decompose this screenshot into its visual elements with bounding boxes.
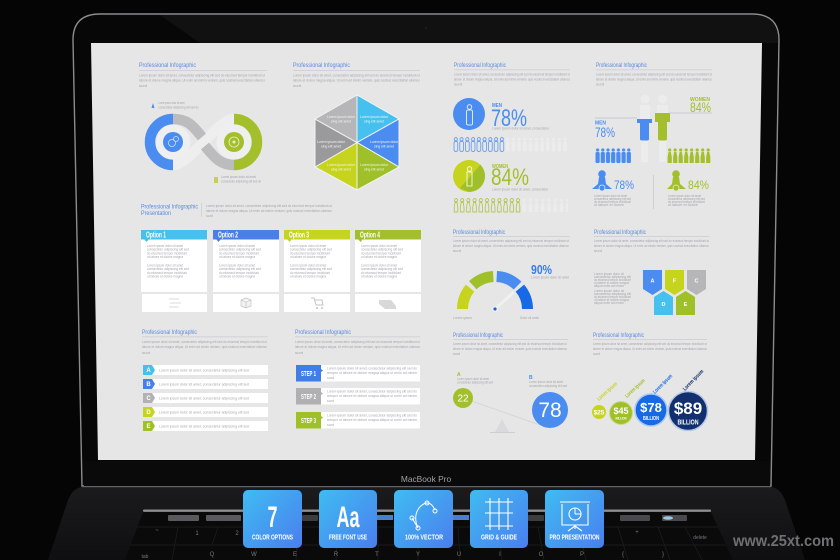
text: columns: Lorem ipsum dolor sit amet [594,194,627,198]
bubble: $78: BILLION [643,416,659,422]
panel: hexagon [293,62,420,190]
chart: hexagon: sing elit amet [331,168,351,172]
callout: B: consectetur adipiscing elit sed [529,384,567,388]
chart: hexagon: sing elit amet [364,120,384,124]
tile: grid and guide: GRID & GUIDE [481,532,517,542]
step 1 [296,365,420,382]
card: option 2: ut labore et dolore magna [219,255,255,259]
card: option 2: ut labore et dolore magna [219,274,255,278]
bubble: $89: $89 [674,399,702,418]
card: option 2: consectetur adipiscing elit sed [219,267,261,271]
tile: free font use [319,490,377,548]
text block: sunt [593,352,600,356]
list rows: Lorem ipsum dolor sit amet, consectetur adipiscing elit sed [159,396,249,400]
pictogram row: men [453,137,568,152]
card: option 3: do eiusmod tempor incididunt [290,252,330,256]
panel: gauge [453,229,570,320]
list rows: D [146,410,151,416]
callout: top: consectetur adipiscing elit sed do [158,106,199,110]
text block [596,72,712,86]
heading: Professional Infographic [596,62,648,69]
list rows: Lorem ipsum dolor sit amet, consectetur adipiscing elit sed [159,410,249,414]
list rows: Lorem ipsum dolor sit amet, consectetur adipiscing elit sed [159,382,249,386]
keyboard labels: 2 [235,531,239,537]
text: columns: Lorem ipsum dolor sit amet [668,194,701,198]
tile: free font use: FREE FONT USE [329,532,367,542]
stat: 90%: 90% [531,262,552,277]
heading [454,62,570,70]
rotated labels: Lorem Ipsum [682,369,705,392]
text block: Lorem ipsum dolor sit amet, consectetur adipiscing elit sed do eiusmod tempor incididunt ut [596,72,712,76]
card: option 3: ut labore et dolore magna [290,274,326,278]
tile: vector [394,490,453,548]
chart: hexagon [315,95,399,190]
chart: shields [643,270,706,315]
card: option 4: ut labore et dolore magna [361,255,397,259]
card: option 1: Lorem ipsum dolor sit amet [147,244,183,248]
text block: Lorem ipsum dolor sit amet, consectetur adipiscing elit sed do eiusmod tempor incididunt ut [293,74,420,78]
text: side notes: ut labore et dolore magna [594,298,629,302]
text: side notes: aliqua enim ad minim [594,284,624,288]
step 1: STEP 1 [301,371,316,378]
women stat: WOMEN [492,164,508,170]
screen [91,43,762,460]
text block [293,74,420,88]
chart: hexagon: sing elit amet [374,144,394,148]
text: columns: consectetur adipiscing elit sed [668,197,705,201]
stat: men: 78% [614,178,634,192]
callout: B [529,375,567,388]
keyboard labels: { [622,552,624,558]
step 3: STEP 3 [301,418,316,425]
panel: letter list [142,329,268,431]
heading: Professional Infographic [454,62,507,69]
panel: options [141,203,421,312]
chart: hexagon: Lorem ipsum dolor [360,163,389,167]
chart: gauge [462,276,528,312]
heading: Professional Infographic [295,329,352,336]
card: option 1: do eiusmod tempor incididunt [147,271,187,275]
text block: Lorem ipsum dolor sit amet, consectetur adipiscing elit sed do eiusmod tempor incididunt ut [454,72,570,76]
text: side notes: do eiusmod tempor incididunt [594,295,631,299]
step 2 [296,388,420,404]
text block: labore et dolore magna aliqua. Ut enim ad minim veniam, quis nostrud exercitation ullamco [593,347,707,351]
text block: labore et dolore magna aliqua. Ut enim ad minim veniam, quis nostrud exercitation ullamco [142,345,267,349]
stat: men [592,170,634,192]
women label [690,97,711,115]
text block: labore et dolore magna aliqua. Ut enim ad minim veniam, quis nostrud exercitation ullamco [596,78,712,82]
card: option 3: Lorem ipsum dolor sit amet [290,264,326,268]
callout: A: consectetur adipiscing elit sed [457,380,493,384]
card: option 3: Lorem ipsum dolor sit amet [290,244,326,248]
pictogram rows [595,148,711,163]
chart: hexagon: Lorem ipsum dolor [327,163,356,167]
keyboard labels: 1 [195,531,199,537]
card: option 4: consectetur adipiscing elit sed [361,248,403,252]
chart: hexagon: Lorem ipsum dolor [370,140,399,144]
bubble: $78: $78 [640,400,662,415]
card: option 4: Lorem ipsum dolor sit amet [361,264,397,268]
list rows: Lorem ipsum dolor sit amet, consectetur adipiscing elit sed [159,368,249,372]
men label: MEN [595,120,606,126]
keyboard labels: Y [416,552,420,558]
text: columns: do eiusmod tempor incididunt [594,200,631,204]
card: option 1 [141,230,207,312]
step 1: Lorem ipsum dolor sit amet, consectetur adipiscing elit sed do [327,366,417,370]
bubble: $45 [610,402,632,424]
keyboard labels: I [499,552,501,558]
icon: women circle [453,160,485,192]
card: option 2: do eiusmod tempor incididunt [219,271,259,275]
card: option 2: Option 2 [218,230,238,240]
text block: labore et dolore magna aliqua. Ut enim ad minim veniam, quis nostrud exercitation ullamco [295,345,420,349]
text block [206,204,332,218]
card: option 1: consectetur adipiscing elit sed [147,267,189,271]
pictogram row: women [453,198,568,213]
card: option 4: do eiusmod tempor incididunt [361,271,401,275]
tile: color options: COLOR OPTIONS [252,532,293,542]
MacBook Pro label: MacBook Pro [401,474,451,484]
text block: sunt [453,249,461,253]
callout: B: B [529,375,533,381]
card: option 3: consectetur adipiscing elit sed [290,267,332,271]
callout: bottom: consectetur adipiscing elit sed do [221,180,261,184]
panel: gender comparison [592,62,712,209]
callout: A [457,372,493,384]
card: option 4: consectetur adipiscing elit sed [361,267,403,271]
step 3: Lorem ipsum dolor sit amet, consectetur adipiscing elit sed do [327,414,417,418]
bubble: $25: $25 [594,410,605,416]
chart: shields: A [651,278,655,284]
heading: Professional Infographic [139,62,197,69]
list rows: A [146,368,151,374]
tile: grid and guide [470,490,528,548]
panel: balance scale [453,332,568,433]
chart: shields: F [673,278,677,284]
text block: sunt [142,351,150,355]
step 2: STEP 2 [301,394,316,401]
keyboard labels: U [457,552,461,558]
heading: Professional Infographic [453,229,506,236]
text block: Lorem ipsum dolor sit amet, consectetur adipiscing elit sed do eiusmod tempor incididunt ut [594,239,709,243]
text: columns [594,175,705,209]
text block [453,239,569,253]
text block [594,239,709,253]
chart: hexagon: Lorem ipsum dolor [317,140,346,144]
text block: sunt [454,82,462,86]
panel: steps [295,329,420,428]
men stat: MEN [492,103,502,109]
step 2: tempor ut labore et dolore magna aliqua ut enim ad minim [327,394,417,398]
text block: sunt [453,352,460,356]
text block: labore et dolore magna aliqua. Ut enim ad minim veniam, quis nostrud exercitation ullamco [293,78,420,82]
men stat: Lorem ipsum dolor sit amet, consectetur [492,126,550,130]
keyboard labels: ~ [155,528,159,534]
text block: labore et dolore magna aliqua. Ut enim ad minim veniam, quis nostrud exercitation ullamco [454,78,570,82]
chart: scale: 78 [538,399,562,422]
list rows [143,365,268,431]
card: option 1: ut labore et dolore magna [147,255,183,259]
stat: 90%: Lorem ipsum dolor sit amet [531,276,569,280]
text block [295,340,420,355]
card: option 4 [355,230,421,312]
heading: Professional Infographic [593,332,645,339]
stat: women: 84% [688,178,709,192]
tile: pro presentation: PRO PRESENTATION [550,532,600,542]
card: option 4: do eiusmod tempor incididunt [361,252,401,256]
panel: money bubbles [592,332,708,430]
tile: free font use: Aa [336,501,360,534]
text block: sunt [596,82,604,86]
chart: shields: D [662,302,666,308]
chart: scale: 22 [457,394,469,404]
text: side notes: consectetur adipiscing elit [594,275,631,279]
list rows: Lorem ipsum dolor sit amet, consectetur adipiscing elit sed [159,424,249,428]
card: option 2: do eiusmod tempor incididunt [219,252,259,256]
list rows: B [146,382,151,388]
keyboard labels: } [662,552,664,558]
text block: labore et dolore magna aliqua. Ut enim ad minim veniam, quis nostrud exercitation ullamco [139,78,265,82]
keyboard labels [142,528,707,560]
bubble: $45: MILLION [616,416,627,420]
step 1: sunt [327,376,334,380]
keyboard labels: delete [693,535,707,541]
text block: labore et dolore magna aliqua. Ut enim ad minim veniam, quis nostrud exercitation ullamco [453,244,569,248]
women label: 84% [690,99,711,115]
step 3 [296,412,420,428]
callout: bottom: Lorem ipsum dolor sit amet [221,175,256,179]
card: option 4: Lorem ipsum dolor sit amet [361,244,397,248]
text block [454,72,570,86]
keyboard labels: P [580,552,584,558]
chart: shields: E [684,302,688,308]
text: side notes [594,272,631,305]
text block: Lorem ipsum dolor sit amet, consectetur adipiscing elit sed do eiusmod tempor incididunt ut [453,239,569,243]
text block: Lorem ipsum dolor sit amet, consectetur adipiscing elit sed do eiusmod tempor incididunt ut [593,342,707,346]
text: columns: do eiusmod tempor incididunt [668,200,705,204]
card: option 3: do eiusmod tempor incididunt [290,271,330,275]
chart: filled figures [595,94,712,162]
bubble: $78 [635,394,667,426]
text block: sunt [295,351,303,355]
tile: color options: 7 [268,501,278,534]
text: side notes: Lorem ipsum dolor sit [594,289,624,293]
step 3: sunt [327,423,334,427]
touch bar buttons [168,515,687,521]
text: columns: ut labore et dolore [594,203,624,207]
card: option 2: Lorem ipsum dolor sit amet [219,244,255,248]
chart: shields: C [695,278,699,284]
text block [453,342,567,356]
keyboard labels: T [375,552,379,558]
chart: hexagon: sing elit amet [364,168,384,172]
men stat: 78% [491,105,527,132]
card: option 2 [213,230,279,312]
chart: hexagon: Lorem ipsum dolor [327,115,356,119]
chart: hexagon: Lorem ipsum dolor [360,115,389,119]
heading: Professional Infographic [293,62,351,69]
list rows: C [146,396,151,402]
text block: Lorem ipsum dolor sit amet, consectetur adipiscing elit sed do eiusmod tempor incididunt ut [453,342,567,346]
women stat: Lorem ipsum dolor sit amet, consectetur [492,188,549,192]
text block: sunt [594,249,602,253]
card: option 4: Option 4 [360,230,380,240]
text block [139,74,265,88]
text block: sunt [206,214,213,218]
card: option 1: consectetur adipiscing elit sed [147,248,189,252]
women stat: 84% [491,164,529,191]
card: option 3: Option 3 [289,230,309,240]
text: columns: consectetur adipiscing elit sed [594,197,631,201]
callout: A: Lorem ipsum dolor sit amet [457,377,489,381]
step 2: sunt [327,399,334,403]
heading: Professional Infographic [453,332,503,339]
heading [596,62,712,70]
text block: labore et dolore magna aliqua. Ut enim ad minim veniam, quis nostrud exercitation ullamco [206,209,332,213]
card: option 3 [284,230,350,312]
rotated labels: Lorem Ipsum [596,381,619,402]
bubble: $89: BILLION [678,420,698,426]
gauge labels [453,316,539,320]
card: option 2: Lorem ipsum dolor sit amet [219,264,255,268]
bubble: $45: $45 [613,406,629,416]
callout: bottom [214,175,261,184]
text block: sunt [139,84,147,88]
heading: Presentation [141,210,171,217]
card: option 1: Lorem ipsum dolor sit amet [147,264,183,268]
heading: Professional Infographic [142,329,198,336]
keyboard labels: R [334,552,339,558]
heading [141,203,202,217]
panel: men and women percentages [453,62,570,213]
card: option 1: ut labore et dolore magna [147,274,183,278]
text: side notes: ut labore et dolore magna [594,281,629,285]
stat: 90% [531,262,569,280]
step 1: tempor ut labore et dolore magna aliqua ut enim ad minim [327,371,417,375]
keyboard labels: E [293,552,297,558]
panel: shield tiles [594,229,709,315]
card: option 1: do eiusmod tempor incididunt [147,252,187,256]
card: option 2: consectetur adipiscing elit sed [219,248,261,252]
callout: B: Lorem ipsum dolor sit amet [529,380,563,384]
keyboard labels: W [251,552,257,558]
tile: vector: 100% VECTOR [405,532,443,542]
text block: labore et dolore magna aliqua. Ut enim ad minim veniam, quis nostrud exercitation ullamco [594,244,709,248]
rotated labels [596,369,705,402]
bubble: $89 [668,392,708,430]
laptop lid frame [73,14,779,487]
list rows: E [146,424,151,430]
women label: WOMEN [690,97,710,103]
rotated labels: Lorem Ipsum [624,378,647,399]
tile: color options [243,490,302,548]
stat: women [667,170,709,192]
keyboard labels: O [539,552,544,558]
chart: scale [453,388,568,433]
text block [142,340,267,355]
card: option 4: ut labore et dolore magna [361,274,397,278]
text block: Lorem ipsum dolor sit amet, consectetur adipiscing elit sed do eiusmod tempor incididunt ut [206,204,332,208]
callout: top [152,101,199,110]
panel: infinity loop [139,62,267,184]
text block: Lorem ipsum dolor sit amet, consectetur adipiscing elit sed do eiusmod tempor incididunt ut [142,340,267,344]
gauge labels: Dolor sit amet [520,316,539,320]
rotated labels: Lorem Ipsum [652,373,674,395]
callout: top: Lorem ipsum dolor sit amet [158,101,185,105]
men label: 78% [595,124,615,140]
text block: Lorem ipsum dolor sit amet, consectetur adipiscing elit sed do eiusmod tempor incididunt ut [295,340,420,344]
text: columns: ut labore et dolore [668,203,698,207]
keyboard labels: + [635,530,639,536]
text: side notes: Lorem ipsum dolor sit [594,272,624,276]
men label [595,120,615,140]
card: option 3: ut labore et dolore magna [290,255,326,259]
step 2: Lorem ipsum dolor sit amet, consectetur adipiscing elit sed do [327,390,417,394]
text block: labore et dolore magna aliqua. Ut enim ad minim veniam, quis nostrud exercitation ullamco [453,347,567,351]
tile: pro presentation [545,490,604,548]
keyboard labels: tab [142,554,149,560]
gauge labels: Lorem ipsum [453,316,472,320]
text block [593,342,707,356]
callout: A: A [457,372,461,378]
keyboard labels: Q [210,552,215,558]
chart: hexagon: sing elit amet [331,120,351,124]
text: side notes: consectetur adipiscing elit [594,292,631,296]
heading: Professional Infographic [141,204,199,210]
chart: hexagon: sing elit amet [321,144,341,148]
text block: sunt [293,84,301,88]
chart: infinity [150,119,257,165]
icon: men circle [453,98,485,130]
card: option 1: Option 1 [146,230,166,240]
text block: Lorem ipsum dolor sit amet, consectetur adipiscing elit sed do eiusmod tempor incididunt ut [139,74,265,78]
step 3: tempor ut labore et dolore magna aliqua ut enim ad minim [327,418,417,422]
text: side notes: do eiusmod tempor incididunt [594,278,631,282]
heading: Professional Infographic [594,229,647,236]
card: option 3: consectetur adipiscing elit sed [290,248,332,252]
text: side notes: aliqua enim ad minim [594,301,624,305]
laptop base [48,487,805,560]
